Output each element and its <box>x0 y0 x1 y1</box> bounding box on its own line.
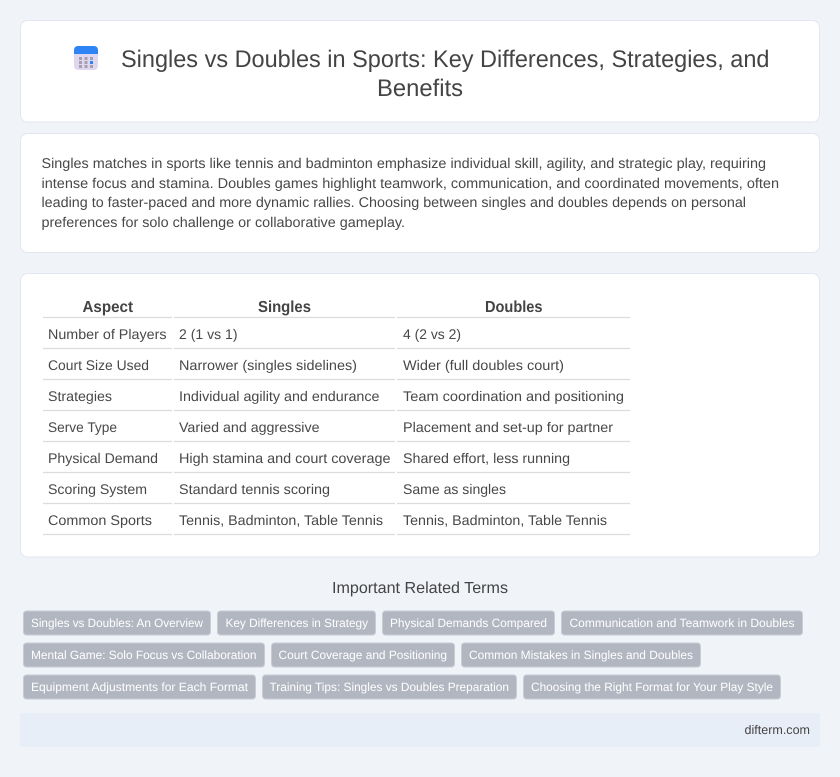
text block: introduction: preferences for solo challenge or collaborative gameplay. <box>42 215 405 231</box>
text block: introduction: leading to faster-paced and more dynamic rallies. Choosing between singles and doubles depends on personal <box>42 195 746 211</box>
tag <box>272 643 454 667</box>
text block: introduction: intense focus and stamina. Doubles games highlight teamwork, communication, and coordinated movements, often <box>42 176 779 192</box>
icon: calendar <box>74 46 98 70</box>
tag: Singles vs Doubles: An Overview <box>31 616 203 630</box>
row: number of players: 4 (2 vs 2) <box>403 326 461 342</box>
row: strategies: Strategies <box>48 388 112 404</box>
row: scoring system: Same as singles <box>403 481 506 497</box>
tag group: related terms <box>24 611 802 699</box>
tag <box>218 611 376 635</box>
footer <box>20 713 820 747</box>
panel: comparison table <box>20 274 820 557</box>
row: physical demand <box>48 450 570 466</box>
footer: difterm.com <box>744 723 810 737</box>
tag: Key Differences in Strategy <box>226 616 368 630</box>
row: serve type: Varied and aggressive <box>179 419 320 435</box>
row: court size used: Wider (full doubles court) <box>403 357 564 373</box>
text block: introduction <box>42 156 779 231</box>
row: common sports: Tennis, Badminton, Table Tennis <box>179 512 383 528</box>
tag <box>524 675 780 699</box>
row: strategies <box>48 388 624 404</box>
text block: introduction: Singles matches in sports like tennis and badminton emphasize individual skill, agility, and strategic play, requiring <box>42 156 766 172</box>
tag <box>562 611 802 635</box>
row: court size used <box>48 357 564 373</box>
tag: Equipment Adjustments for Each Format <box>31 680 249 694</box>
row: common sports: Tennis, Badminton, Table Tennis <box>403 512 607 528</box>
row: number of players <box>48 326 461 342</box>
tag <box>462 643 700 667</box>
row: court size used: Court Size Used <box>48 357 149 373</box>
tag <box>262 675 516 699</box>
row: physical demand: Physical Demand <box>48 450 158 466</box>
tag <box>24 611 210 635</box>
title <box>121 46 770 102</box>
row: court size used: Narrower (singles sidelines) <box>179 357 357 373</box>
heading: important related terms: Important Related Terms <box>332 580 508 597</box>
row: scoring system: Scoring System <box>48 481 147 497</box>
row: scoring system <box>48 481 506 497</box>
row: serve type <box>48 419 613 435</box>
tag <box>24 643 264 667</box>
row: number of players: 2 (1 vs 1) <box>179 326 238 342</box>
tag: Physical Demands Compared <box>390 616 547 630</box>
row: serve type: Placement and set-up for partner <box>403 419 613 435</box>
table header <box>82 299 543 316</box>
table header: Aspect <box>82 299 134 316</box>
tag: Mental Game: Solo Focus vs Collaboration <box>31 648 256 662</box>
panel: header <box>20 20 820 122</box>
row: physical demand: High stamina and court coverage <box>179 450 391 466</box>
row: strategies: Individual agility and endurance <box>179 388 380 404</box>
tag: Communication and Teamwork in Doubles <box>570 616 794 630</box>
tag: Training Tips: Singles vs Doubles Preparation <box>270 680 509 694</box>
tag <box>382 611 554 635</box>
tag: Common Mistakes in Singles and Doubles <box>469 648 693 662</box>
table header: Doubles <box>485 299 543 316</box>
row: strategies: Team coordination and positioning <box>403 388 624 404</box>
row: physical demand: Shared effort, less running <box>403 450 570 466</box>
row: common sports: Common Sports <box>48 512 152 528</box>
tag <box>24 675 256 699</box>
table header: Singles <box>258 299 311 316</box>
tag: Court Coverage and Positioning <box>278 648 447 662</box>
row: serve type: Serve Type <box>48 419 117 435</box>
row: scoring system: Standard tennis scoring <box>179 481 330 497</box>
row: number of players: Number of Players <box>48 326 166 342</box>
title: Benefits <box>377 75 463 102</box>
tag: Choosing the Right Format for Your Play Style <box>531 680 773 694</box>
title: Singles vs Doubles in Sports: Key Differences, Strategies, and <box>121 46 770 73</box>
row: common sports <box>48 512 607 528</box>
panel: introduction <box>20 134 820 252</box>
